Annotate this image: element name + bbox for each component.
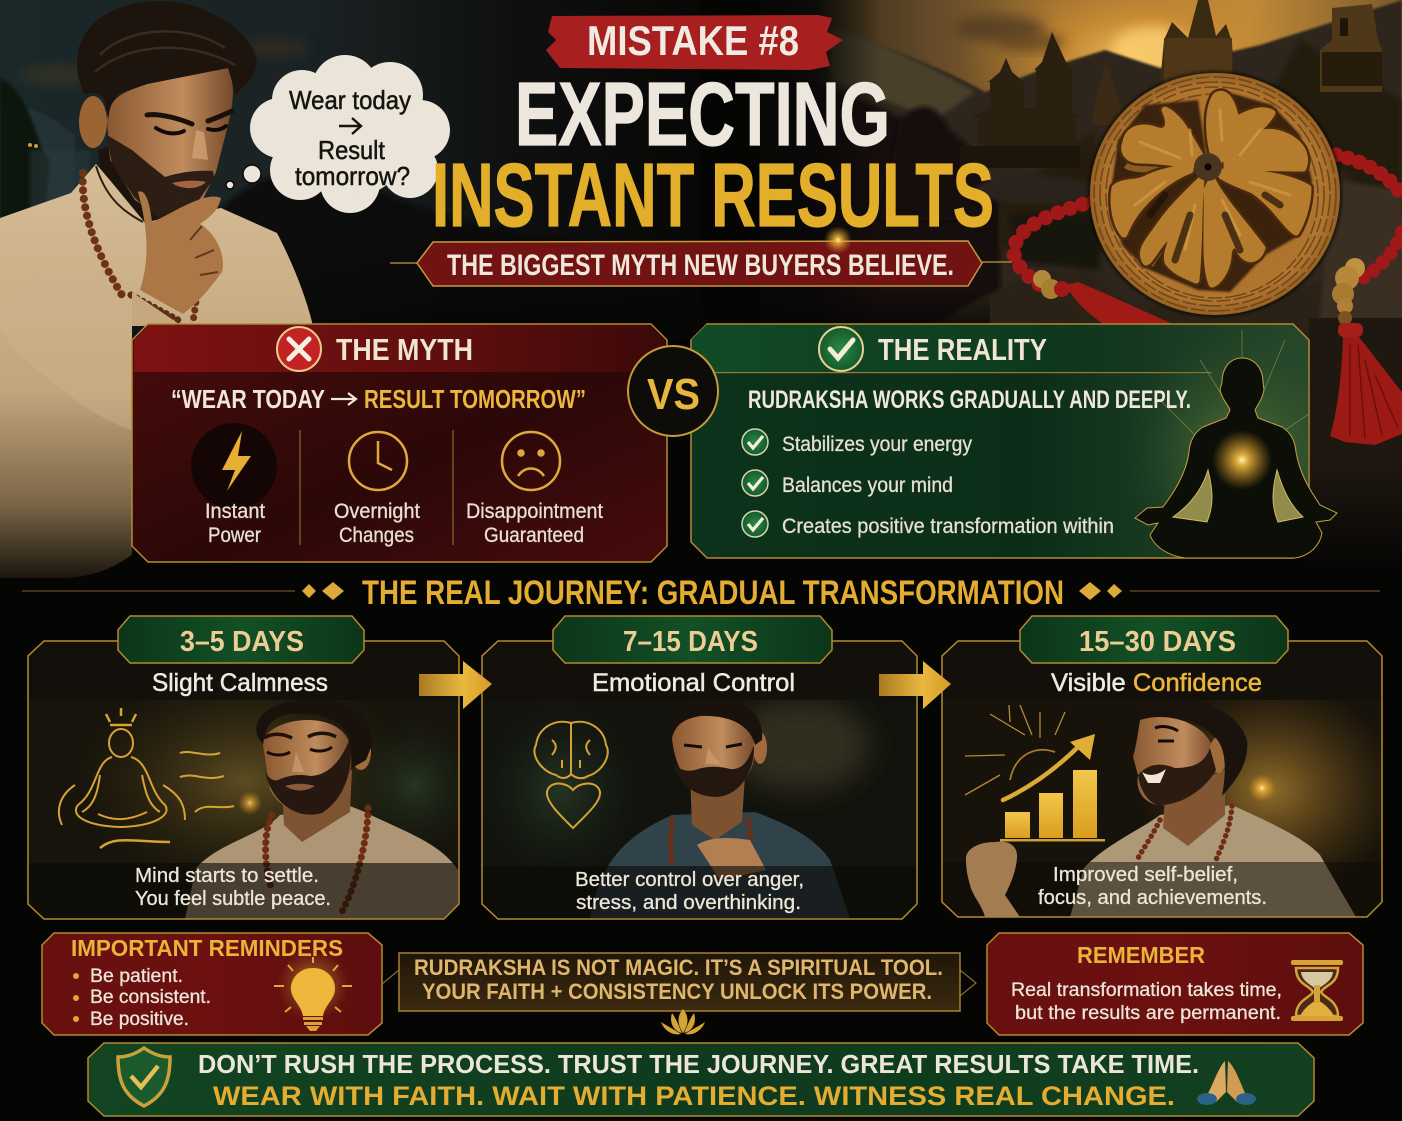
myth icon labels: Overnight xyxy=(334,500,420,523)
rudraksha bead xyxy=(1089,72,1341,316)
photo backdrop 3 xyxy=(1148,700,1381,869)
reality checklist xyxy=(742,429,1114,538)
icon: meditating outline xyxy=(59,708,234,848)
card 2 title: Emotional Control xyxy=(592,669,795,697)
myth icon labels: Guaranteed xyxy=(484,524,584,547)
sleeve cuff xyxy=(132,292,182,326)
panel: not magic statement: RUDRAKSHA IS NOT MAGIC. IT’S A SPIRITUAL TOOL. xyxy=(414,955,943,980)
step card 3 xyxy=(942,616,1400,917)
thought bubble xyxy=(226,55,450,213)
icon: praying hands xyxy=(1197,1061,1256,1105)
kurta body xyxy=(0,164,313,578)
hand on chin xyxy=(138,191,223,314)
card 2 caption: stress, and overthinking. xyxy=(576,892,801,914)
card 3 caption: focus, and achievements. xyxy=(1038,887,1267,909)
icon: lightning xyxy=(191,423,277,509)
myth quote: RESULT TOMORROW” xyxy=(364,384,586,414)
card 3 title: Visible Confidence xyxy=(1051,669,1262,697)
icon: raised fist xyxy=(966,842,1020,917)
temple: pagoda xyxy=(960,32,1086,168)
VS badge xyxy=(628,346,718,436)
temple: tall tower xyxy=(1160,0,1234,85)
icon: badge 1 xyxy=(118,616,364,663)
title: INSTANT RESULTS xyxy=(432,146,994,246)
tassel near bead xyxy=(1066,282,1175,325)
man 3: confident smile xyxy=(1070,698,1356,917)
reminder bullets: Be patient. xyxy=(90,966,183,987)
reality checklist: Stabilizes your energy xyxy=(782,432,972,456)
arrow: step 1 to step 2 xyxy=(419,661,492,709)
reminder bullets: Be consistent. xyxy=(90,987,211,1008)
icon: hourglass xyxy=(1291,960,1343,1021)
card 1 caption xyxy=(135,865,331,910)
card 3 caption: Improved self-belief, xyxy=(1053,864,1238,886)
head xyxy=(107,68,233,216)
man 1: calm xyxy=(185,699,458,919)
icon: light bulb xyxy=(274,949,352,1031)
panel: important reminders: IMPORTANT REMINDERS xyxy=(71,935,343,961)
card 1 caption: You feel subtle peace. xyxy=(135,888,331,910)
panel: remember: but the results are permanent. xyxy=(1015,1002,1281,1024)
reality checklist: Creates positive transformation within xyxy=(782,514,1114,538)
panel: not magic statement xyxy=(382,953,976,1034)
icon: badge 3: 15–30 DAYS xyxy=(1079,626,1236,658)
closing text: DON’T RUSH THE PROCESS. TRUST THE JOURNEY. GREAT RESULTS TAKE TIME. xyxy=(198,1051,1199,1079)
hero background: dusk lake on the left xyxy=(0,0,700,340)
icon: badge 2: 7–15 DAYS xyxy=(623,626,758,658)
beard xyxy=(107,135,214,226)
title: EXPECTING xyxy=(515,65,890,165)
myth icon labels: Changes xyxy=(339,524,414,547)
journey heading: THE REAL JOURNEY: GRADUAL TRANSFORMATION xyxy=(362,574,1064,612)
icon: badge 3 xyxy=(1020,616,1288,663)
panel: the myth xyxy=(132,324,667,562)
icon: badge 2 xyxy=(553,616,832,663)
reality statement: RUDRAKSHA WORKS GRADUALLY AND DEEPLY. xyxy=(748,386,1191,414)
myth icon labels: Instant xyxy=(205,500,265,523)
step card 2 xyxy=(480,616,917,919)
rocky ledge xyxy=(935,176,1402,340)
red bead bracelet xyxy=(1014,155,1402,325)
hero background: temples at sunset on the right xyxy=(430,0,1402,570)
panel: remember: Real transformation takes time, xyxy=(1011,979,1282,1001)
myth icon labels: Power xyxy=(208,524,261,547)
subtitle ribbon xyxy=(390,226,1012,286)
mala beads xyxy=(83,173,125,300)
panel: remember xyxy=(987,933,1363,1035)
myth quote xyxy=(171,384,586,414)
photo backdrop 2 xyxy=(508,700,876,848)
myth quote: “WEAR TODAY xyxy=(171,384,325,414)
panel: the reality xyxy=(691,324,1360,570)
closing banner: WEAR WITH FAITH. WAIT WITH PATIENCE. WITNESS REAL CHANGE. xyxy=(213,1081,1175,1111)
card 2 caption xyxy=(575,869,804,914)
arrow: step 2 to step 3 xyxy=(879,661,951,709)
thinking man portrait xyxy=(0,1,313,578)
hair xyxy=(77,1,257,120)
myth icon labels xyxy=(205,500,603,547)
closing banner xyxy=(88,1043,1314,1116)
bubble text: Wear today xyxy=(289,85,411,115)
icon: lotus xyxy=(661,1009,705,1034)
myth heading: THE MYTH xyxy=(336,332,473,367)
bubble text: Result xyxy=(318,135,386,165)
icon: brain and heart xyxy=(534,722,608,828)
VS badge: VS xyxy=(647,370,700,419)
reminder bullets: Be positive. xyxy=(90,1009,189,1030)
card 1 title: Slight Calmness xyxy=(152,669,328,697)
bubble text xyxy=(289,85,411,191)
temple: right tower xyxy=(1320,4,1382,92)
red tassel xyxy=(1330,323,1402,445)
step card 1 xyxy=(28,616,480,919)
card 1 caption: Mind starts to settle. xyxy=(135,865,319,887)
man 2: hand on heart xyxy=(590,698,850,919)
card 3 caption xyxy=(1038,864,1267,909)
panel: not magic statement: YOUR FAITH + CONSISTENCY UNLOCK ITS POWER. xyxy=(422,979,932,1004)
myth icon labels: Disappointment xyxy=(466,500,603,523)
meditating silhouette xyxy=(1135,358,1337,558)
icon: rising bar chart xyxy=(965,705,1105,842)
reality checklist: Balances your mind xyxy=(782,473,953,497)
bubble text: tomorrow? xyxy=(295,161,410,191)
reminder bullets xyxy=(73,966,211,1030)
icon: shield xyxy=(118,1048,170,1106)
panel: remember: REMEMBER xyxy=(1077,942,1205,968)
icon: clock xyxy=(349,432,407,490)
icon: red cross xyxy=(277,327,321,371)
title xyxy=(432,65,994,246)
card 2 caption: Better control over anger, xyxy=(575,869,804,891)
photo backdrop 1 xyxy=(104,700,458,863)
panel: important reminders xyxy=(42,933,382,1035)
icon: sad face xyxy=(502,432,560,490)
subtitle ribbon: THE BIGGEST MYTH NEW BUYERS BELIEVE. xyxy=(447,249,954,282)
brows and eyes xyxy=(147,111,232,124)
mistake banner: MISTAKE #8 xyxy=(587,17,799,64)
journey heading xyxy=(22,574,1380,612)
neck and collar xyxy=(98,140,195,224)
icon: badge 1: 3–5 DAYS xyxy=(180,626,304,658)
ear xyxy=(79,96,107,148)
temple: small shrine xyxy=(1092,62,1124,125)
icon: green tick xyxy=(819,327,863,371)
reality heading: THE REALITY xyxy=(878,332,1047,367)
